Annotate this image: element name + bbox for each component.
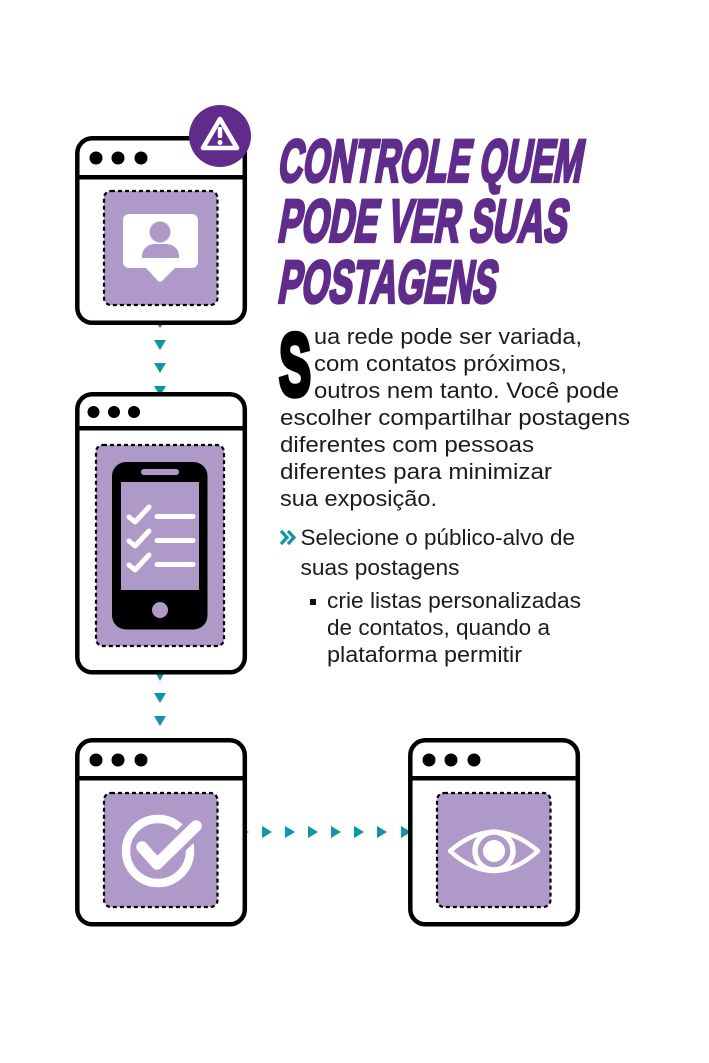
sub-list item: custom lists: crie listas personalizadas (327, 588, 581, 613)
panel: browser window with eye (410, 740, 578, 924)
panel: browser window with check mark (77, 740, 245, 924)
intro paragraph: ua rede pode ser variada, (314, 324, 582, 349)
list item: select audience: Selecione o público-alvo de (300, 525, 575, 550)
arrow: window 3 to window 4 (239, 826, 411, 838)
intro paragraph: outros nem tanto. Você pode (314, 378, 619, 403)
intro paragraph: escolher compartilhar postagens (280, 405, 630, 430)
title: POSTAGENS (274, 248, 504, 315)
sub-list item: custom lists (327, 588, 581, 667)
list item: select audience (300, 525, 575, 580)
icon: profile speech bubble (123, 214, 198, 282)
intro paragraph: diferentes com pessoas (280, 432, 534, 457)
panel: browser window with profile message (77, 138, 245, 323)
intro paragraph: com contatos próximos, (314, 351, 567, 376)
intro paragraph: diferentes para minimizar (280, 459, 552, 484)
sub-list item: custom lists: plataforma permitir (327, 642, 522, 667)
icon: circled check (126, 819, 196, 883)
icon: eye (450, 832, 538, 871)
list item: select audience: suas postagens (300, 555, 460, 580)
panel: browser window with phone checklist (77, 394, 245, 672)
icon: smartphone with checklist (112, 462, 208, 630)
title (274, 127, 590, 315)
arrow: window 1 to window 2 (154, 320, 166, 396)
arrow: window 2 to window 3 (154, 670, 166, 726)
icon: double chevron bullet (281, 531, 294, 544)
sub-list item: custom lists: de contatos, quando a (327, 615, 551, 640)
drop cap S: S (279, 315, 311, 414)
icon: square bullet (310, 599, 316, 605)
icon: warning badge (189, 105, 251, 167)
intro paragraph (280, 324, 630, 511)
intro paragraph: sua exposição. (280, 486, 437, 511)
